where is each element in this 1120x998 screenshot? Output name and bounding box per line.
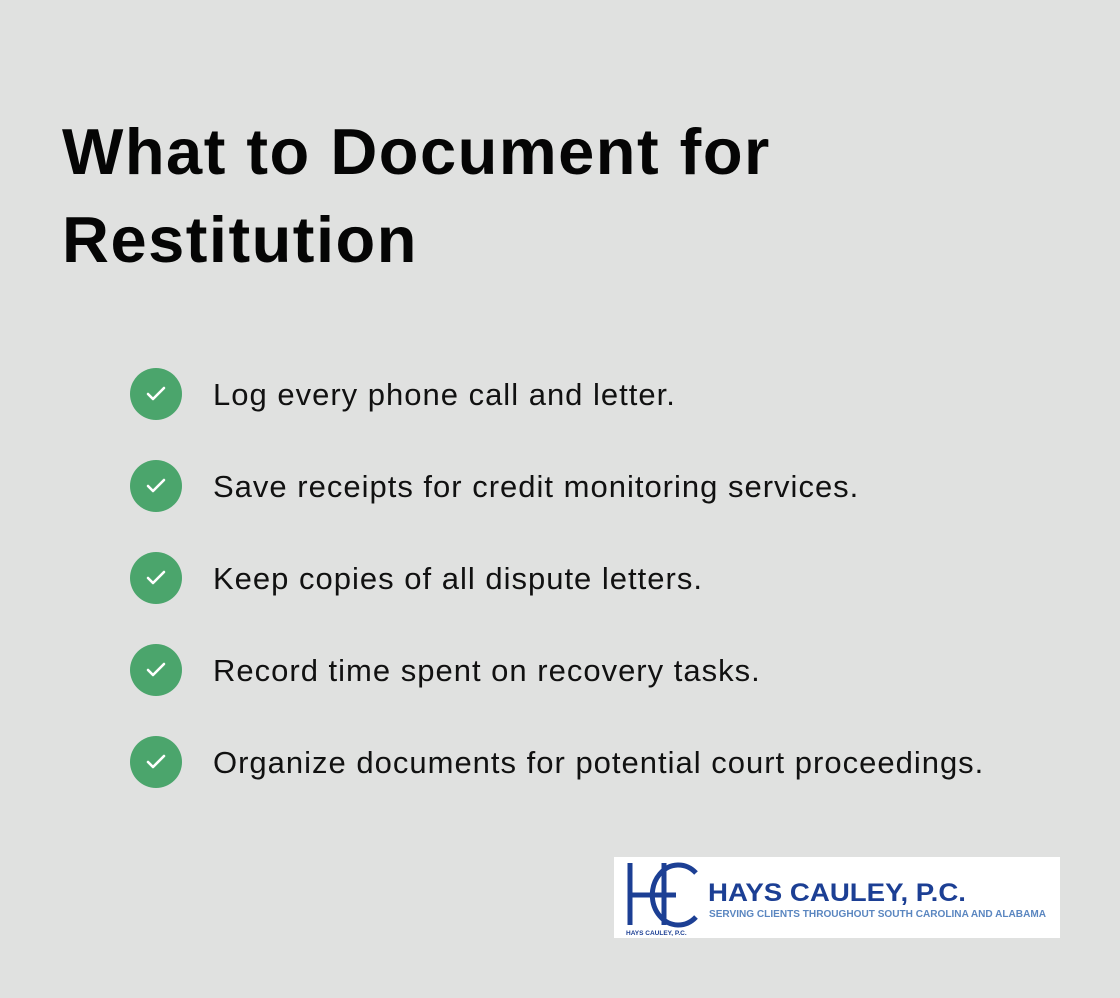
- item 2: [130, 460, 859, 512]
- logo text: [626, 879, 1046, 937]
- title: Restitution: [62, 203, 418, 276]
- text: Keep copies of all dispute letters.: [213, 561, 703, 596]
- logo text: HAYS CAULEY, P.C.: [626, 930, 687, 937]
- text: Save receipts for credit monitoring services.: [213, 469, 859, 504]
- logo text: SERVING CLIENTS THROUGHOUT SOUTH CAROLINA AND ALABAMA: [709, 909, 1046, 920]
- icon: check: [130, 736, 182, 788]
- icon: check: [130, 368, 182, 420]
- item 3: [130, 552, 703, 604]
- icon: check: [130, 644, 182, 696]
- logo text: HAYS CAULEY, P.C.: [708, 879, 966, 907]
- text: Record time spent on recovery tasks.: [213, 653, 761, 688]
- icon: check: [130, 552, 182, 604]
- logo: [614, 857, 1060, 938]
- item 5: [130, 736, 984, 788]
- text: Log every phone call and letter.: [213, 377, 676, 412]
- item 4: [130, 644, 761, 696]
- title: [62, 115, 771, 276]
- logo mark: [630, 863, 696, 925]
- icon: check: [130, 460, 182, 512]
- text: Organize documents for potential court proceedings.: [213, 745, 984, 780]
- title: What to Document for: [62, 115, 771, 188]
- item 1: [130, 368, 676, 420]
